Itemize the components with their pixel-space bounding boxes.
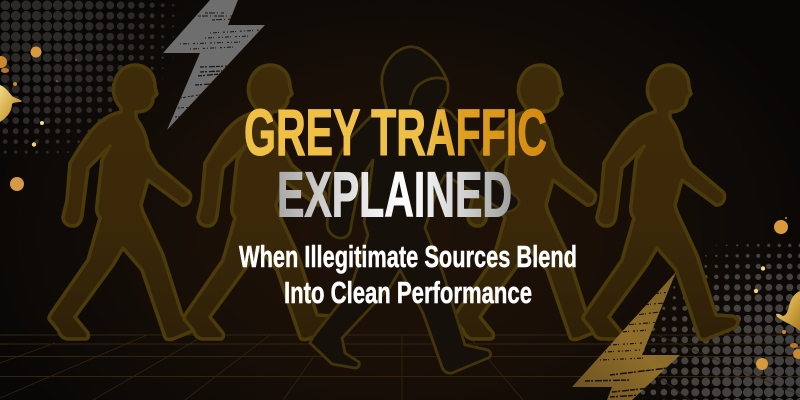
walker figure 4 [454,65,609,340]
title line: grey traffic: GREY TRAFFIC [244,95,547,169]
hooded figure [310,47,519,373]
halftone dots: bottom right [632,244,800,400]
gold splatter: bottom right [754,217,800,370]
walker figure 5 [583,65,738,340]
gold splatter: top left [0,46,77,191]
subtitle line 2: Into Clean Performance [284,275,532,310]
subtitle line 1: When Illegitimate Sources Blend [239,239,577,274]
walker figure 2 [184,65,339,340]
floor grid [0,335,800,400]
subtitle [239,239,577,310]
halftone dots: top left [0,0,174,154]
walker figure 1 [49,65,204,340]
lightning bolt: gold [572,272,680,400]
title line: explained: EXPLAINED [277,158,512,230]
lightning bolt: grey [163,0,265,130]
title [244,95,547,230]
